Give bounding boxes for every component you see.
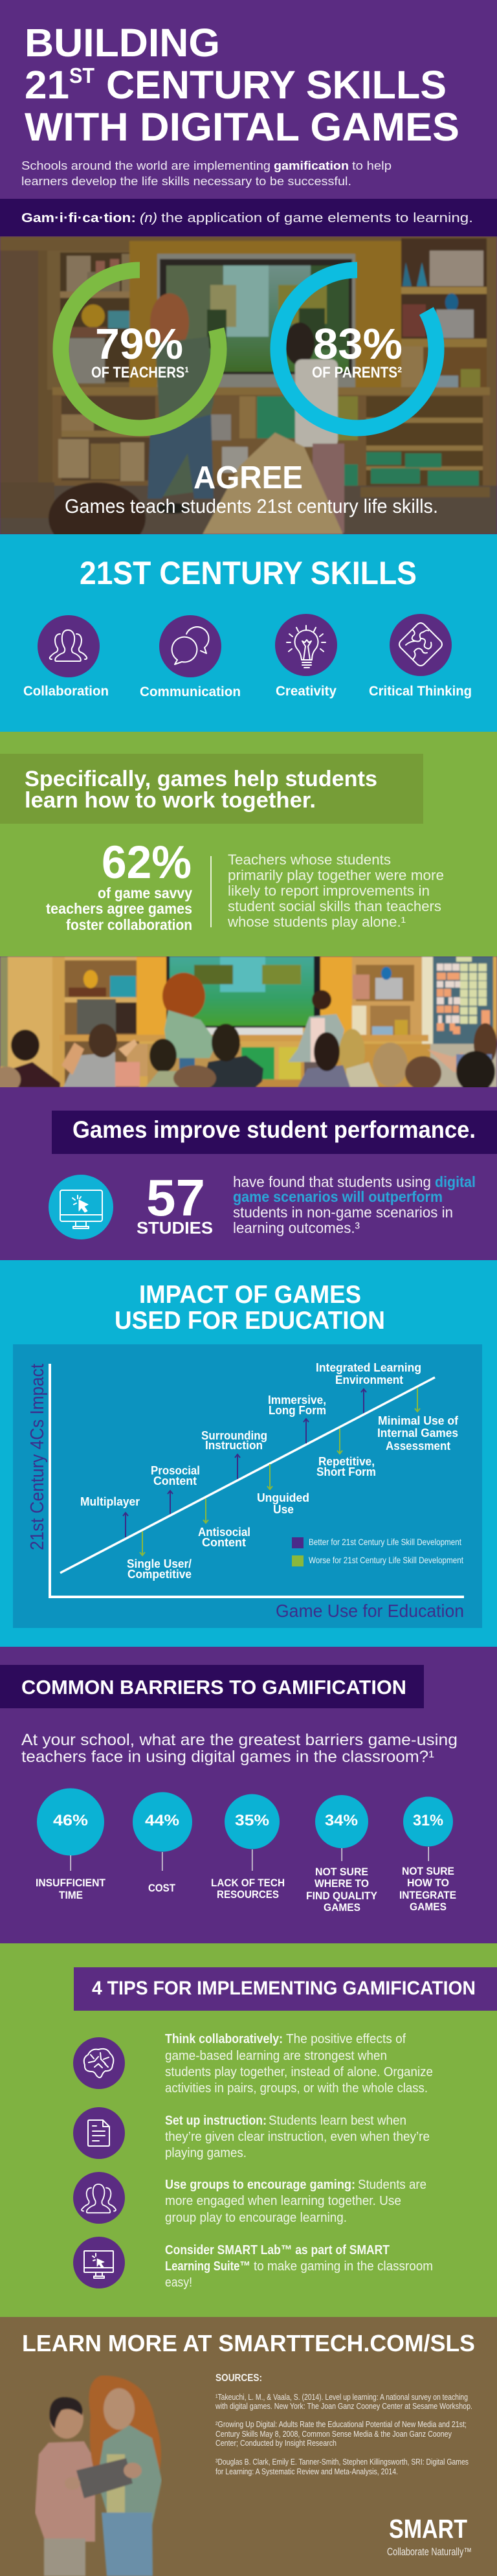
agree subtext: Games teach students 21st century life skills. [65, 495, 438, 517]
banner heading: Specifically, games help students [25, 767, 377, 791]
learn more heading: LEARN MORE AT SMARTTECH.COM/SLS [22, 2330, 475, 2356]
banner heading: Games improve student performance. [72, 1116, 476, 1143]
tip: consider smart lab: to make gaming in the classroom [254, 2259, 433, 2274]
title: WITH DIGITAL GAMES [25, 105, 459, 149]
intro text: learners develop the life skills necessary to be successful. [21, 174, 351, 188]
barrier: cost: COST [148, 1882, 176, 1894]
tip: think collaboratively: Think collaboratively: [165, 2032, 283, 2046]
point labels: Prosocial [151, 1463, 200, 1477]
barrier: not sure how to integrate games: GAMES [410, 1901, 447, 1913]
tip: set up instruction: playing games. [165, 2146, 247, 2160]
panel: collaboration stat [0, 732, 497, 956]
point labels [80, 1361, 459, 1581]
title: ST [69, 63, 94, 87]
legend: Better for 21st Century Life Skill Development [309, 1537, 461, 1547]
title: 21 [25, 63, 69, 107]
panel: common barriers [0, 1647, 497, 1943]
legend: Worse for 21st Century Life Skill Development [309, 1555, 463, 1565]
title: CENTURY SKILLS [106, 63, 447, 107]
sources: SOURCES: [215, 2373, 262, 2384]
point labels: Use [273, 1502, 294, 1516]
point labels: Content [202, 1535, 246, 1549]
question: At your school, what are the greatest barriers game-using [21, 1731, 458, 1749]
point labels: Long Form [269, 1403, 326, 1417]
tip: set up instruction [73, 2107, 430, 2160]
point labels: Minimal Use of [378, 1414, 459, 1427]
tip: consider smart lab: easy! [165, 2276, 192, 2290]
body text [227, 852, 444, 930]
barrier: not sure how to integrate games: NOT SURE [402, 1865, 454, 1877]
body text [233, 1173, 476, 1236]
body text: have found that students using [233, 1173, 431, 1190]
axes [50, 1364, 464, 1597]
tip: think collaboratively: game-based learning are strongest when [165, 2049, 387, 2063]
stat: 57 studies: 57 [146, 1169, 205, 1226]
stat ring: 79% of teachers [61, 270, 219, 428]
panel: tips [0, 1943, 497, 2317]
skill: critical thinking: Critical Thinking [369, 684, 472, 699]
x axis label: Game Use for Education [276, 1601, 464, 1621]
stat: 57 studies [137, 1169, 213, 1237]
banner heading: learn how to work together. [25, 788, 316, 813]
barrier: cost [133, 1792, 192, 1894]
sources: Center; Conducted by Insight Research [215, 2438, 337, 2448]
body text: Teachers whose students [228, 852, 391, 868]
banner heading: 4 TIPS FOR IMPLEMENTING GAMIFICATION [92, 1978, 476, 1999]
body text: whose students play alone.¹ [227, 914, 406, 930]
panel: classroom photo with agreement stats [0, 236, 497, 554]
sources: Century Skills May 8, 2008, Common Sense Media & the Joan Ganz Cooney [215, 2429, 452, 2439]
intro text: to help [352, 159, 392, 172]
barrier: lack of tech resources: LACK OF TECH [211, 1877, 285, 1889]
point labels: Instruction [205, 1438, 263, 1452]
barrier: not sure how to integrate games: INTEGRATE [399, 1889, 456, 1901]
intro text: gamification [274, 159, 349, 172]
body text: learning outcomes.³ [233, 1219, 360, 1236]
stat: 57 studies: STUDIES [137, 1218, 213, 1237]
panel: 21st century skills [0, 534, 497, 732]
body text: primarily play together were more [228, 867, 444, 883]
barrier: not sure where to find quality games: NOT SURE [315, 1866, 368, 1878]
tip: think collaboratively: students play together, instead of alone. Organize [165, 2065, 433, 2079]
point labels: Multiplayer [80, 1495, 140, 1508]
point labels: Surrounding [201, 1429, 267, 1442]
intro text: Schools around the world are implementing [21, 159, 271, 172]
chart [13, 1344, 482, 1628]
stat ring: 79% of teachers: 79% [95, 320, 183, 368]
skill: collaboration: Collaboration [23, 684, 109, 699]
tip: set up instruction: they’re given clear instruction, even when they’re [165, 2130, 430, 2144]
tip: consider smart lab: Learning Suite™ [165, 2259, 250, 2274]
point labels: Integrated Learning [316, 1361, 421, 1374]
point labels: Competitive [127, 1567, 192, 1581]
point labels: Assessment [386, 1439, 450, 1452]
barrier: not sure where to find quality games: 34% [325, 1812, 358, 1829]
tip: consider smart lab: Consider SMART Lab™ as part of SMART [165, 2243, 390, 2257]
stat: 62%: 62% [102, 837, 192, 888]
stat: 62% [46, 837, 192, 933]
question [21, 1731, 458, 1766]
icon: monitor with cursor [49, 1175, 113, 1239]
body text: student social skills than teachers [228, 898, 441, 914]
tip: consider smart lab [73, 2237, 433, 2290]
logo: SMART: Collaborate Naturally™ [387, 2546, 472, 2558]
banner heading: COMMON BARRIERS TO GAMIFICATION [21, 1676, 406, 1699]
stat: 62%: of game savvy [98, 885, 192, 901]
heading: USED FOR EDUCATION [115, 1307, 385, 1335]
body text: likely to report improvements in [228, 883, 430, 899]
body text: digital [435, 1173, 476, 1190]
barrier: not sure how to integrate games [399, 1796, 456, 1913]
definition band: (n) [140, 211, 157, 225]
sources: for Learning: A Systematic Review and Meta-Analysis, 2014. [215, 2467, 398, 2476]
intro text [21, 159, 392, 188]
photo: two students with tablet [35, 2375, 162, 2576]
tip: use groups: more engaged when learning together. Use [165, 2194, 401, 2208]
logo: SMART [387, 2514, 472, 2558]
barrier: insufficient time [36, 1789, 106, 1901]
barrier: lack of tech resources: RESOURCES [217, 1888, 279, 1901]
better arrows [123, 1389, 366, 1537]
question: teachers face in using digital games in the classroom?¹ [21, 1748, 434, 1766]
skill: communication: Communication [140, 684, 241, 699]
tip: think collaboratively: activities in pairs, groups, or with the whole class. [165, 2081, 428, 2096]
point labels: Environment [335, 1373, 403, 1386]
point labels: Repetitive, [318, 1454, 375, 1468]
barrier: lack of tech resources [211, 1794, 285, 1901]
tip: use groups: Use groups to encourage gaming: [165, 2178, 355, 2192]
skill: communication [140, 615, 241, 699]
panel: header [0, 0, 497, 199]
barrier: not sure where to find quality games: GAMES [324, 1901, 360, 1914]
tip: set up instruction: Students learn best when [269, 2114, 406, 2128]
skill: creativity [275, 614, 337, 699]
legend [292, 1537, 463, 1566]
skills heading: 21ST CENTURY SKILLS [80, 555, 417, 591]
heading [115, 1281, 385, 1335]
barrier: not sure where to find quality games: FIND QUALITY [306, 1890, 378, 1902]
tip: think collaboratively [73, 2032, 433, 2096]
definition band [0, 199, 497, 236]
y axis label: 21st Century 4Cs Impact [27, 1364, 48, 1550]
stat: 62%: teachers agree games [46, 900, 192, 917]
tip: think collaboratively: The positive effects of [286, 2032, 406, 2046]
definition band: the application of game elements to learning. [161, 211, 473, 225]
barrier: not sure where to find quality games [306, 1795, 378, 1914]
barrier: insufficient time: 46% [53, 1812, 88, 1829]
point labels: Internal Games [377, 1426, 458, 1440]
title: BUILDING [25, 21, 220, 65]
body text: students in non-game scenarios in [233, 1204, 453, 1221]
barrier: not sure how to integrate games: HOW TO [407, 1877, 449, 1889]
skill: creativity: Creativity [276, 684, 337, 699]
agree heading: AGREE [193, 460, 303, 495]
logo: SMART: SMART [389, 2514, 467, 2544]
banner heading [0, 1665, 424, 1708]
tip: use groups: Students are [358, 2178, 426, 2192]
tip: use groups: group play to encourage learning. [165, 2211, 347, 2225]
skill: collaboration [23, 615, 109, 699]
banner heading [52, 1111, 497, 1154]
point labels: Antisocial [198, 1525, 250, 1539]
barrier: lack of tech resources: 35% [235, 1812, 269, 1829]
trend line [60, 1377, 435, 1573]
stat ring: 79% of teachers: OF TEACHERS¹ [91, 364, 189, 381]
skill: critical thinking [369, 614, 472, 699]
banner heading [0, 754, 423, 824]
barrier: insufficient time: TIME [59, 1889, 83, 1901]
point labels: Immersive, [268, 1393, 326, 1407]
barrier: not sure how to integrate games: 31% [413, 1812, 443, 1829]
body text: game scenarios will outperform [233, 1188, 443, 1205]
stat ring: 83% of parents: OF PARENTS² [312, 364, 402, 381]
panel: footer [0, 2317, 497, 2576]
definition band: Gam·i·fi·ca·tion: [21, 211, 136, 225]
heading: IMPACT OF GAMES [139, 1281, 361, 1309]
barrier: cost: 44% [145, 1812, 179, 1829]
barrier: insufficient time: INSUFFICIENT [36, 1877, 106, 1889]
barrier: not sure where to find quality games: WHERE TO [315, 1877, 369, 1890]
photo: classroom students [0, 956, 497, 1092]
point labels: Content [153, 1474, 197, 1487]
point labels: Unguided [257, 1491, 309, 1504]
stat: 62%: foster collaboration [66, 916, 192, 933]
point labels: Short Form [316, 1465, 376, 1478]
tip: set up instruction: Set up instruction: [165, 2114, 267, 2128]
panel: student performance [0, 1087, 497, 1260]
sources [215, 2373, 472, 2476]
worse arrows [140, 1388, 420, 1555]
tip: use groups [73, 2172, 426, 2225]
stat ring: 83% of parents: 83% [313, 320, 403, 368]
point labels: Single User/ [127, 1557, 192, 1570]
panel: impact of games [0, 1260, 497, 1647]
banner heading [74, 1967, 497, 2011]
title [25, 21, 459, 149]
photo: dimmed classroom [0, 236, 497, 554]
stat ring: 83% of parents [278, 270, 436, 428]
